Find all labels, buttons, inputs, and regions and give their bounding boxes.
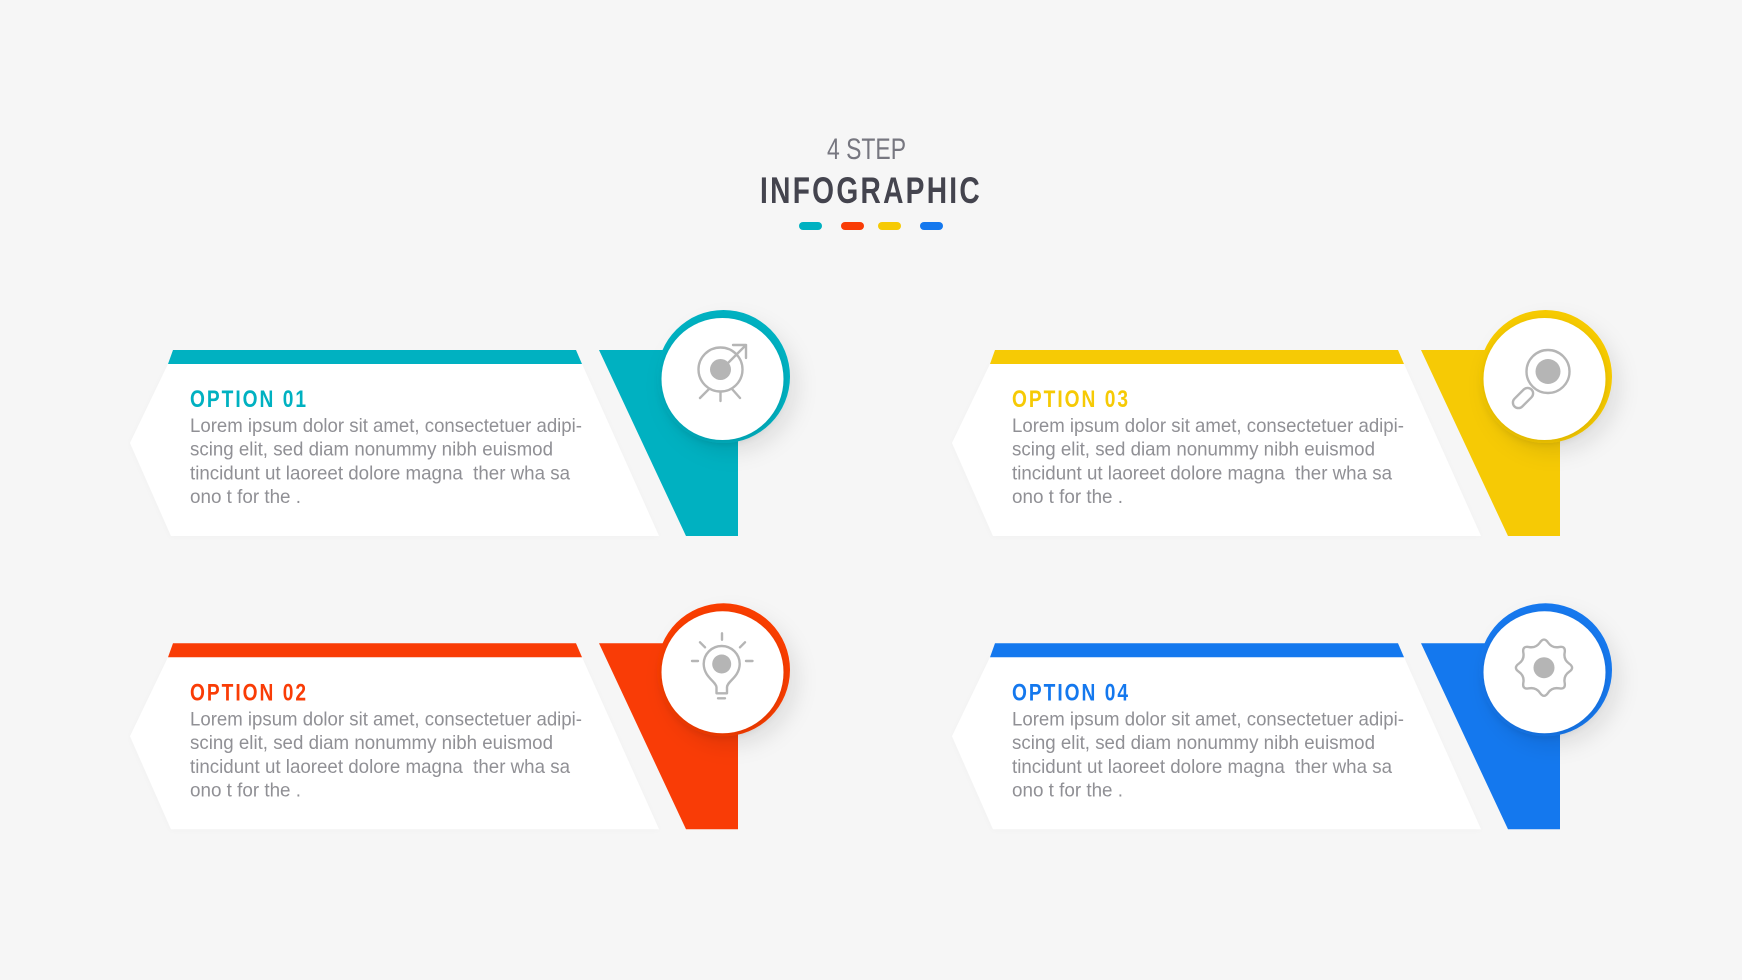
body text: ono t for the .	[190, 486, 301, 508]
white arrow panel	[952, 364, 1481, 536]
body text: Lorem ipsum dolor sit amet, consectetuer adipi-	[1012, 415, 1404, 437]
white circle	[1484, 318, 1606, 440]
white arrow panel	[130, 364, 659, 536]
title: 4 step: 4 STEP	[827, 133, 906, 166]
icon: magnifying glass	[1511, 350, 1570, 410]
white circle	[662, 318, 784, 440]
body text: scing elit, sed diam nonummy nibh euismod	[1012, 732, 1375, 754]
body text	[1012, 415, 1404, 508]
ring circle	[657, 603, 790, 736]
top colour bar	[168, 350, 582, 364]
title: infographic: INFOGRAPHIC	[760, 170, 982, 211]
panel: option 02	[130, 603, 790, 829]
body text	[190, 415, 582, 508]
white arrow panel	[952, 657, 1481, 829]
ring circle	[657, 310, 790, 443]
panel: option 03	[952, 310, 1612, 536]
body text	[1012, 708, 1404, 801]
ring circle	[1479, 603, 1612, 736]
panel: option 01	[130, 310, 790, 536]
body text	[190, 708, 582, 801]
heading: option 01: OPTION 01	[190, 386, 308, 413]
body text: Lorem ipsum dolor sit amet, consectetuer adipi-	[190, 708, 582, 730]
body text: Lorem ipsum dolor sit amet, consectetuer adipi-	[1012, 708, 1404, 730]
colour wedge	[1421, 350, 1560, 536]
colour wedge	[599, 643, 738, 829]
white circle	[1484, 611, 1606, 733]
body text: tincidunt ut laoreet dolore magna ther wha sa	[190, 462, 570, 484]
icon: light bulb	[692, 633, 752, 698]
heading: option 03: OPTION 03	[1012, 386, 1130, 413]
body text: ono t for the .	[190, 779, 301, 801]
top colour bar	[990, 643, 1404, 657]
body text: scing elit, sed diam nonummy nibh euismod	[190, 438, 553, 460]
body text: ono t for the .	[1012, 486, 1123, 508]
colour wedge	[1421, 643, 1560, 829]
heading: option 02: OPTION 02	[190, 679, 308, 706]
body text: tincidunt ut laoreet dolore magna ther wha sa	[190, 756, 570, 778]
top colour bar	[990, 350, 1404, 364]
icon: gear	[1516, 640, 1572, 696]
white arrow panel	[130, 657, 659, 829]
body text: Lorem ipsum dolor sit amet, consectetuer adipi-	[190, 415, 582, 437]
ring circle	[1479, 310, 1612, 443]
colour wedge	[599, 350, 738, 536]
body text: scing elit, sed diam nonummy nibh euismod	[190, 732, 553, 754]
panel: option 04	[952, 603, 1612, 829]
icon: target with arrow	[698, 345, 746, 401]
white circle	[662, 611, 784, 733]
heading: option 04: OPTION 04	[1012, 679, 1130, 706]
colour dashes legend	[799, 222, 943, 230]
body text: ono t for the .	[1012, 779, 1123, 801]
body text: scing elit, sed diam nonummy nibh euismod	[1012, 438, 1375, 460]
body text: tincidunt ut laoreet dolore magna ther wha sa	[1012, 756, 1392, 778]
top colour bar	[168, 643, 582, 657]
body text: tincidunt ut laoreet dolore magna ther wha sa	[1012, 462, 1392, 484]
